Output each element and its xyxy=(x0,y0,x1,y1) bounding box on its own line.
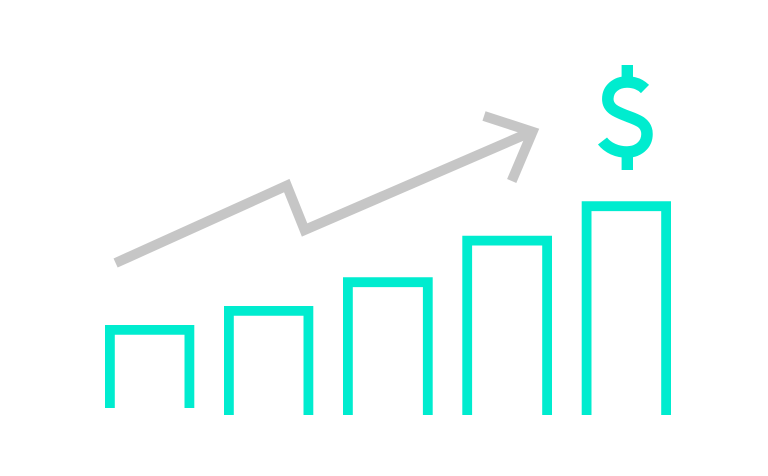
dollar bottom stem xyxy=(622,152,633,170)
icon: dollar sign xyxy=(602,65,647,170)
arrow shaft xyxy=(116,132,531,263)
arrow head xyxy=(484,116,532,181)
bar 2 xyxy=(229,311,308,415)
dollar S curve xyxy=(602,82,647,152)
bar 3 xyxy=(348,282,428,415)
arrow: rising zigzag trend line xyxy=(116,116,532,263)
bar chart: five ascending outlined bars xyxy=(110,206,666,415)
bar 1 xyxy=(110,330,189,408)
bar 5 xyxy=(587,206,666,415)
dollar top stem xyxy=(622,65,633,82)
bar 4 xyxy=(467,241,547,415)
